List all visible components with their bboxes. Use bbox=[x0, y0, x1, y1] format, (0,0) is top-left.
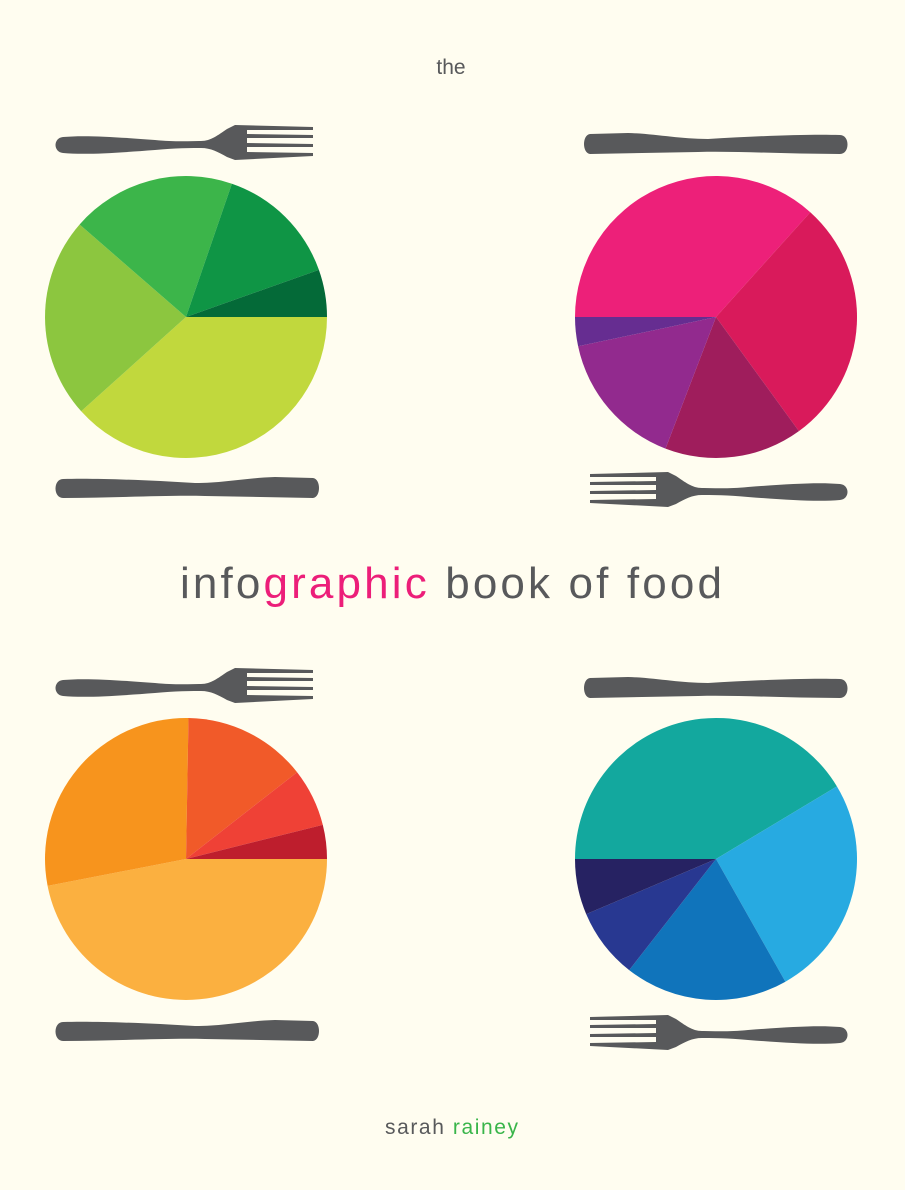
pie chart: orange bbox=[45, 718, 327, 1000]
icon: knife top-left bbox=[56, 477, 319, 498]
icon: knife bottom-left bbox=[56, 1020, 319, 1041]
pie chart: pink bbox=[575, 176, 857, 458]
icon: knife bottom-right bbox=[584, 677, 848, 698]
pie chart: blue bbox=[575, 718, 857, 1000]
author: sarah rainey bbox=[385, 1116, 518, 1139]
icon: fork bottom-left bbox=[56, 668, 313, 703]
title: infographic book of food bbox=[180, 559, 722, 608]
icon: fork top-left bbox=[56, 125, 313, 160]
icon: fork bottom-right bbox=[590, 1015, 848, 1050]
icon: knife top-right bbox=[584, 133, 848, 154]
icon: fork top-right bbox=[590, 472, 848, 507]
pie chart: green bbox=[45, 176, 327, 458]
heading: the: the bbox=[436, 56, 466, 79]
